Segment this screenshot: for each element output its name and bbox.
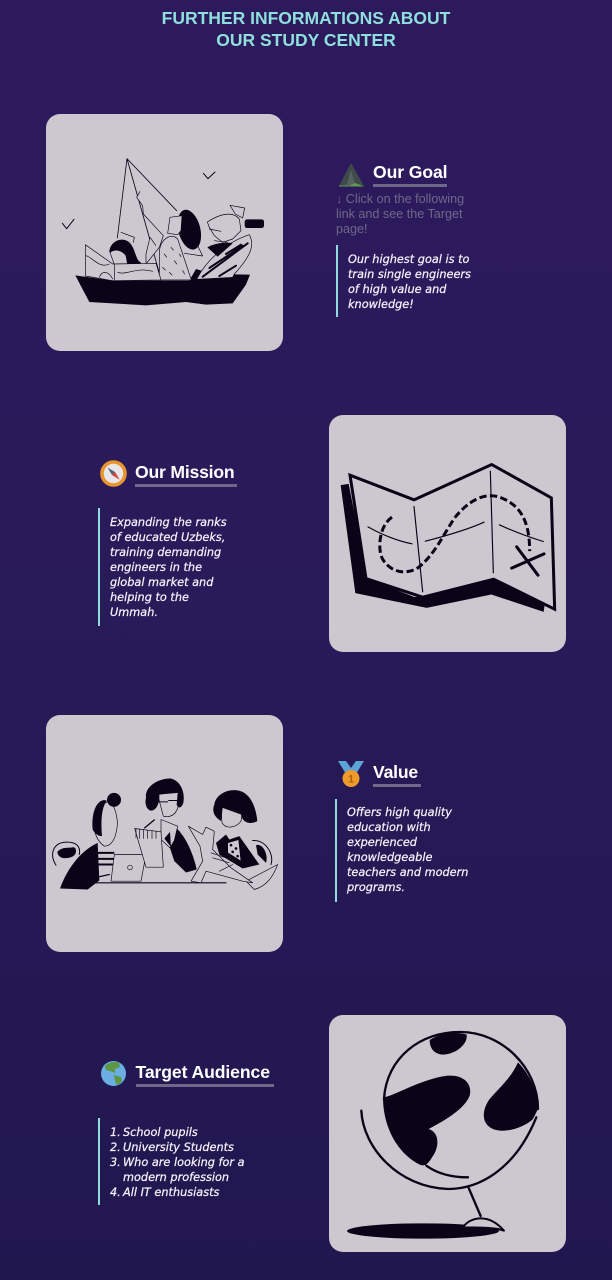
audience list: 3. [110,1156,121,1169]
value quote text: Offers high quality [347,806,452,819]
mission quote text: Ummah. [110,606,158,619]
panel: goal illustration, people in a boat [46,114,283,351]
panel: value illustration, three colleagues [46,714,283,952]
value quote text: experienced [347,836,417,849]
mission quote text: Expanding the ranks [110,516,227,529]
mission quote text: helping to the [110,591,189,604]
audience list: 1. [110,1126,121,1139]
icon: mountain [339,163,364,186]
value quote text: education with [347,821,431,834]
goal quote text: knowledge! [348,298,414,311]
mission quote text: training demanding [110,546,221,559]
title: OUR STUDY CENTER [216,30,396,50]
link hint text: link and see the Target [336,207,462,221]
heading: Target Audience: Target Audience [136,1062,270,1082]
heading: Our Mission: Our Mission [135,462,234,482]
mission quote text: engineers in the [110,561,202,574]
audience list: School pupils [123,1126,198,1139]
goal quote text [336,245,471,317]
icon: medal [338,761,364,787]
goal quote text: train single engineers [348,268,471,281]
link hint text [336,192,464,236]
audience list: Who are looking for a [123,1156,245,1169]
title [162,8,450,50]
mission quote text: global market and [110,576,213,589]
audience list: All IT enthusiasts [123,1186,219,1199]
audience list: University Students [123,1141,234,1154]
heading: Value: Value [373,762,418,782]
audience list [98,1118,245,1205]
audience list: modern profession [123,1171,229,1184]
audience list: 2. [110,1141,121,1154]
value quote text: teachers and modern [347,866,468,879]
audience list: 4. [110,1186,121,1199]
icon: compass [100,460,127,487]
icon: globe [101,1061,126,1086]
link hint text: page! [336,222,368,236]
goal quote text: of high value and [348,283,446,296]
panel: mission illustration, treasure map [329,414,566,652]
title: FURTHER INFORMATIONS ABOUT [162,8,450,28]
panel: audience illustration, globe [329,1015,566,1252]
link hint text: ↓ Click on the following [336,192,464,206]
value quote text: programs. [347,881,405,894]
value quote text: knowledgeable [347,851,432,864]
mission quote text: of educated Uzbeks, [110,531,225,544]
value quote text [335,799,468,902]
mission quote text [98,508,227,626]
heading: Value [373,760,421,787]
heading: Our Goal: Our Goal [373,162,447,182]
icon: medal: 1 [348,774,354,786]
goal quote text: Our highest goal is to [348,253,469,266]
